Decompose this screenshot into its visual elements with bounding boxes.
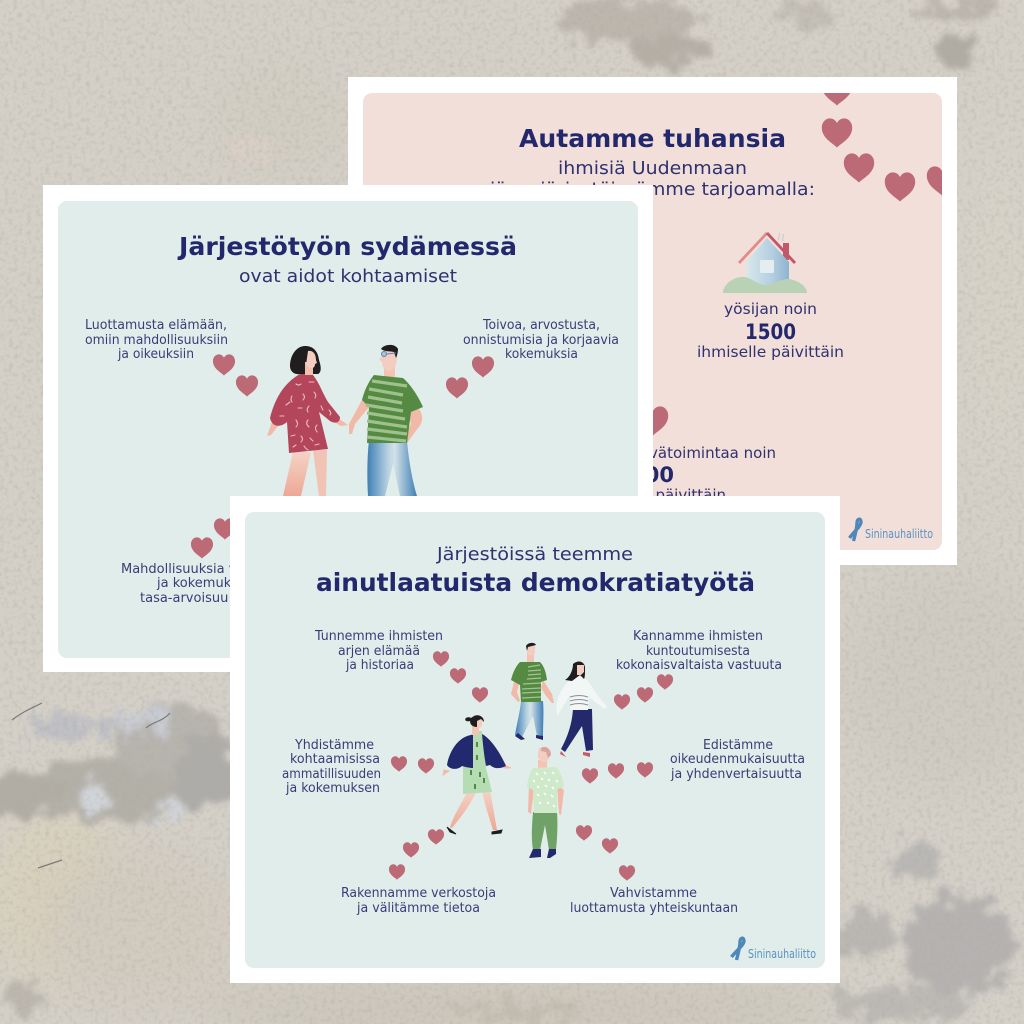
text: opportunities, partly hidden: tasa-arvoisuu xyxy=(140,591,228,606)
heading: ainutlaatuista demokratiatyötä: ainutlaatuista demokratiatyötä xyxy=(316,568,755,597)
text: equality: ja yhdenvertaisuutta xyxy=(670,767,802,782)
text: networks: Rakennamme verkostoja xyxy=(341,886,496,901)
text: opportunities, partly hidden xyxy=(121,562,238,606)
heading: Autamme tuhansia: Autamme tuhansia xyxy=(519,124,786,153)
text: everyday life: Tunnemme ihmisten xyxy=(314,629,443,644)
text: combine expertise: ja kokemuksen xyxy=(285,781,380,796)
logo: Sininauhaliitto: Sininauhaliitto xyxy=(748,947,816,961)
subheading: Järjestöissä teemme: Järjestöissä teemme xyxy=(436,544,633,565)
text: networks: ja välitämme tietoa xyxy=(356,901,480,916)
text: combine expertise: Yhdistämme xyxy=(294,738,374,753)
text: everyday life xyxy=(314,629,443,673)
text: everyday life: ja historiaa xyxy=(345,658,414,673)
text: day activity figure, partly hidden: päivittäin xyxy=(655,486,726,504)
figure: woman in white top, small xyxy=(556,662,607,757)
text: combine expertise: kohtaamisissa xyxy=(290,752,380,767)
text: networks xyxy=(341,886,496,916)
text: day activity figure, partly hidden: päivätoimintaa noin xyxy=(626,444,776,462)
heading: Järjestötyön sydämessä: Järjestötyön sydämessä xyxy=(177,232,517,261)
text: trust in society xyxy=(570,886,738,916)
text: opportunities, partly hidden: Mahdollisuuksia v xyxy=(121,562,237,577)
hearts radiating from centre xyxy=(389,651,673,881)
icon: house on a hill xyxy=(723,233,807,293)
panel: green card, ainutlaatuista demokratiatyötä xyxy=(230,496,840,983)
subheading lines: jäsenjärjestöissämme tarjoamalla: xyxy=(489,179,815,200)
text: opportunities, partly hidden: ja kokemuks xyxy=(156,576,238,591)
hearts xyxy=(191,354,494,559)
text: trust in society: Vahvistamme xyxy=(610,886,697,901)
text: equality: oikeudenmukaisuutta xyxy=(670,752,805,767)
figure: man in striped shirt xyxy=(349,345,423,496)
subheading lines xyxy=(489,158,815,200)
text: hope: Toivoa, arvostusta, xyxy=(482,318,600,333)
text: equality: Edistämme xyxy=(703,738,773,753)
panel: pink card, Autamme tuhansia xyxy=(348,76,957,565)
figure: woman in red dress xyxy=(267,346,348,496)
text: responsibility xyxy=(616,629,782,673)
text: night shelter figure: yösijan noin xyxy=(724,300,817,318)
text: hope: kokemuksia xyxy=(505,347,578,362)
text: equality xyxy=(670,738,805,782)
subheading: ovat aidot kohtaamiset xyxy=(239,266,457,287)
text: trust: ja oikeuksiin xyxy=(117,347,194,362)
heart, partly hidden xyxy=(638,406,668,436)
logo: Sininauhaliitto xyxy=(850,519,933,541)
hearts trail, top right xyxy=(822,93,942,202)
text: responsibility: kuntoutumisesta xyxy=(646,644,750,659)
text: day activity figure, partly hidden xyxy=(626,444,776,504)
figure: man in striped shirt, small xyxy=(511,643,554,740)
text: night shelter figure xyxy=(697,300,844,361)
text: night shelter figure: 1500 xyxy=(745,320,796,344)
figure: man in pale green shirt, small xyxy=(527,747,564,858)
text: trust in society: luottamusta yhteiskuntaan xyxy=(570,901,738,916)
text: trust: Luottamusta elämään, xyxy=(85,318,227,333)
text: night shelter figure: ihmiselle päivittäin xyxy=(697,343,844,361)
text: trust: omiin mahdollisuuksiin xyxy=(85,333,228,348)
subheading lines: ihmisiä Uudenmaan xyxy=(558,158,747,179)
logo: Sininauhaliitto: Sininauhaliitto xyxy=(865,527,933,541)
text: combine expertise xyxy=(282,738,381,796)
panel: green card, Järjestötyön sydämessä xyxy=(43,185,653,672)
text: responsibility: Kannamme ihmisten xyxy=(633,629,763,644)
text: combine expertise: ammatillisuuden xyxy=(282,767,381,782)
text: everyday life: arjen elämää xyxy=(338,644,420,659)
text: hope: onnistumisia ja korjaavia xyxy=(463,333,619,348)
text: hope xyxy=(463,318,619,362)
text: responsibility: kokonaisvaltaista vastuuta xyxy=(616,658,782,673)
text: day activity figure, partly hidden: 00 xyxy=(645,463,674,487)
text: trust xyxy=(85,318,228,362)
figure: woman in navy jacket, small xyxy=(443,715,511,834)
logo: Sininauhaliitto xyxy=(732,938,816,961)
